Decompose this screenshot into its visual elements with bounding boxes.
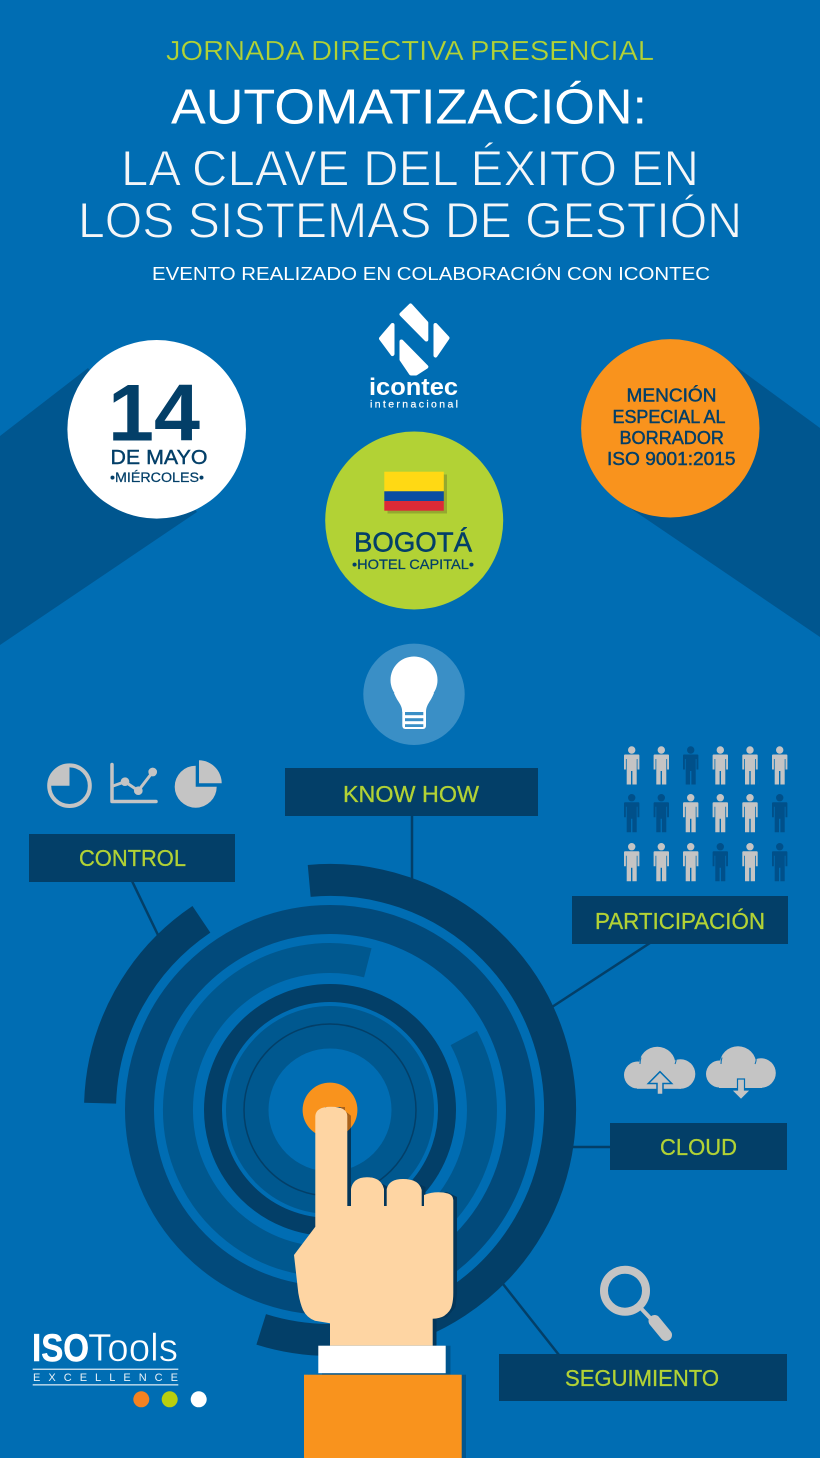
month: DE MAYO xyxy=(110,446,208,469)
label: know how xyxy=(285,768,538,816)
city: BOGOTÁ xyxy=(354,527,473,558)
centre xyxy=(268,1048,392,1172)
label: seguimiento: SEGUIMIENTO xyxy=(565,1365,719,1391)
outer arc xyxy=(261,880,560,1340)
mention text: BORRADOR xyxy=(620,428,724,448)
finger shadow on the touch point xyxy=(340,1107,351,1132)
icons: people grid xyxy=(624,746,787,881)
inner disc xyxy=(226,1006,434,1214)
icons: control charts xyxy=(49,760,222,808)
logo wordmark: icontec xyxy=(369,374,458,401)
subtitle: jornada directiva presencial: JORNADA DIRECTIVA PRESENCIAL xyxy=(166,35,654,66)
icon: cloud download xyxy=(706,1046,776,1100)
hand xyxy=(294,1107,453,1347)
cuff xyxy=(318,1346,446,1373)
icon: light bulb xyxy=(363,644,465,745)
sleeve shadow xyxy=(308,1375,466,1458)
mention badge xyxy=(581,339,760,518)
venue: •HOTEL CAPITAL• xyxy=(352,556,474,572)
label: control: CONTROL xyxy=(79,845,186,871)
concentric dial xyxy=(100,880,560,1340)
partial mid ring xyxy=(178,958,482,1262)
title line 2: LA CLAVE DEL ÉXITO EN xyxy=(121,141,699,197)
title line 3: LOS SISTEMAS DE GESTIÓN xyxy=(78,192,742,248)
icon: cloud upload xyxy=(624,1047,695,1094)
orange touch point xyxy=(303,1083,357,1137)
logo wordmark bold: ISO xyxy=(32,1327,89,1370)
location badge xyxy=(325,432,503,610)
sleeve xyxy=(304,1375,462,1458)
collaboration note: EVENTO REALIZADO EN COLABORACIÓN CON ICONTEC xyxy=(152,263,710,284)
mention text xyxy=(607,385,736,469)
connector lines xyxy=(132,815,650,1355)
mention text: MENCIÓN xyxy=(626,385,716,406)
long shadow: date circle xyxy=(0,368,197,645)
left arc xyxy=(100,919,201,1103)
hand shadow xyxy=(298,1107,457,1347)
logo wordmark regular: Tools xyxy=(88,1327,178,1370)
cuff shadow xyxy=(322,1346,450,1375)
dark ring xyxy=(213,993,447,1227)
date badge xyxy=(67,340,246,519)
icontec logo xyxy=(369,306,458,411)
icon: gauge circle xyxy=(49,765,90,806)
long shadow: mention circle xyxy=(630,362,820,637)
weekday: •MIÉRCOLES• xyxy=(110,470,204,485)
mention text: ESPECIAL AL xyxy=(612,407,726,427)
label: participación: PARTICIPACIÓN xyxy=(595,908,765,934)
label: control xyxy=(29,834,235,882)
icon: colombian flag xyxy=(384,472,447,514)
day number: 14 xyxy=(108,368,200,458)
title: automatización: AUTOMATIZACIÓN: xyxy=(171,80,647,134)
logo subline: EXCELLENCE xyxy=(33,1372,178,1384)
icon: pie chart xyxy=(175,760,222,808)
inner edge xyxy=(244,1024,416,1196)
icon: magnifier xyxy=(604,1270,666,1335)
hand with sleeve xyxy=(294,1107,466,1458)
label: cloud: CLOUD xyxy=(660,1134,737,1160)
icon: line chart xyxy=(112,764,156,802)
label: know how: KNOW HOW xyxy=(343,781,479,807)
label: cloud xyxy=(610,1123,787,1170)
logo subline: internacional xyxy=(370,399,458,411)
label: seguimiento xyxy=(499,1354,787,1401)
label: participación xyxy=(572,896,788,944)
ring xyxy=(140,920,520,1300)
logo dots xyxy=(133,1391,207,1407)
heading block xyxy=(78,35,742,284)
isotools logo xyxy=(32,1327,207,1407)
mention text: ISO 9001:2015 xyxy=(607,449,736,469)
